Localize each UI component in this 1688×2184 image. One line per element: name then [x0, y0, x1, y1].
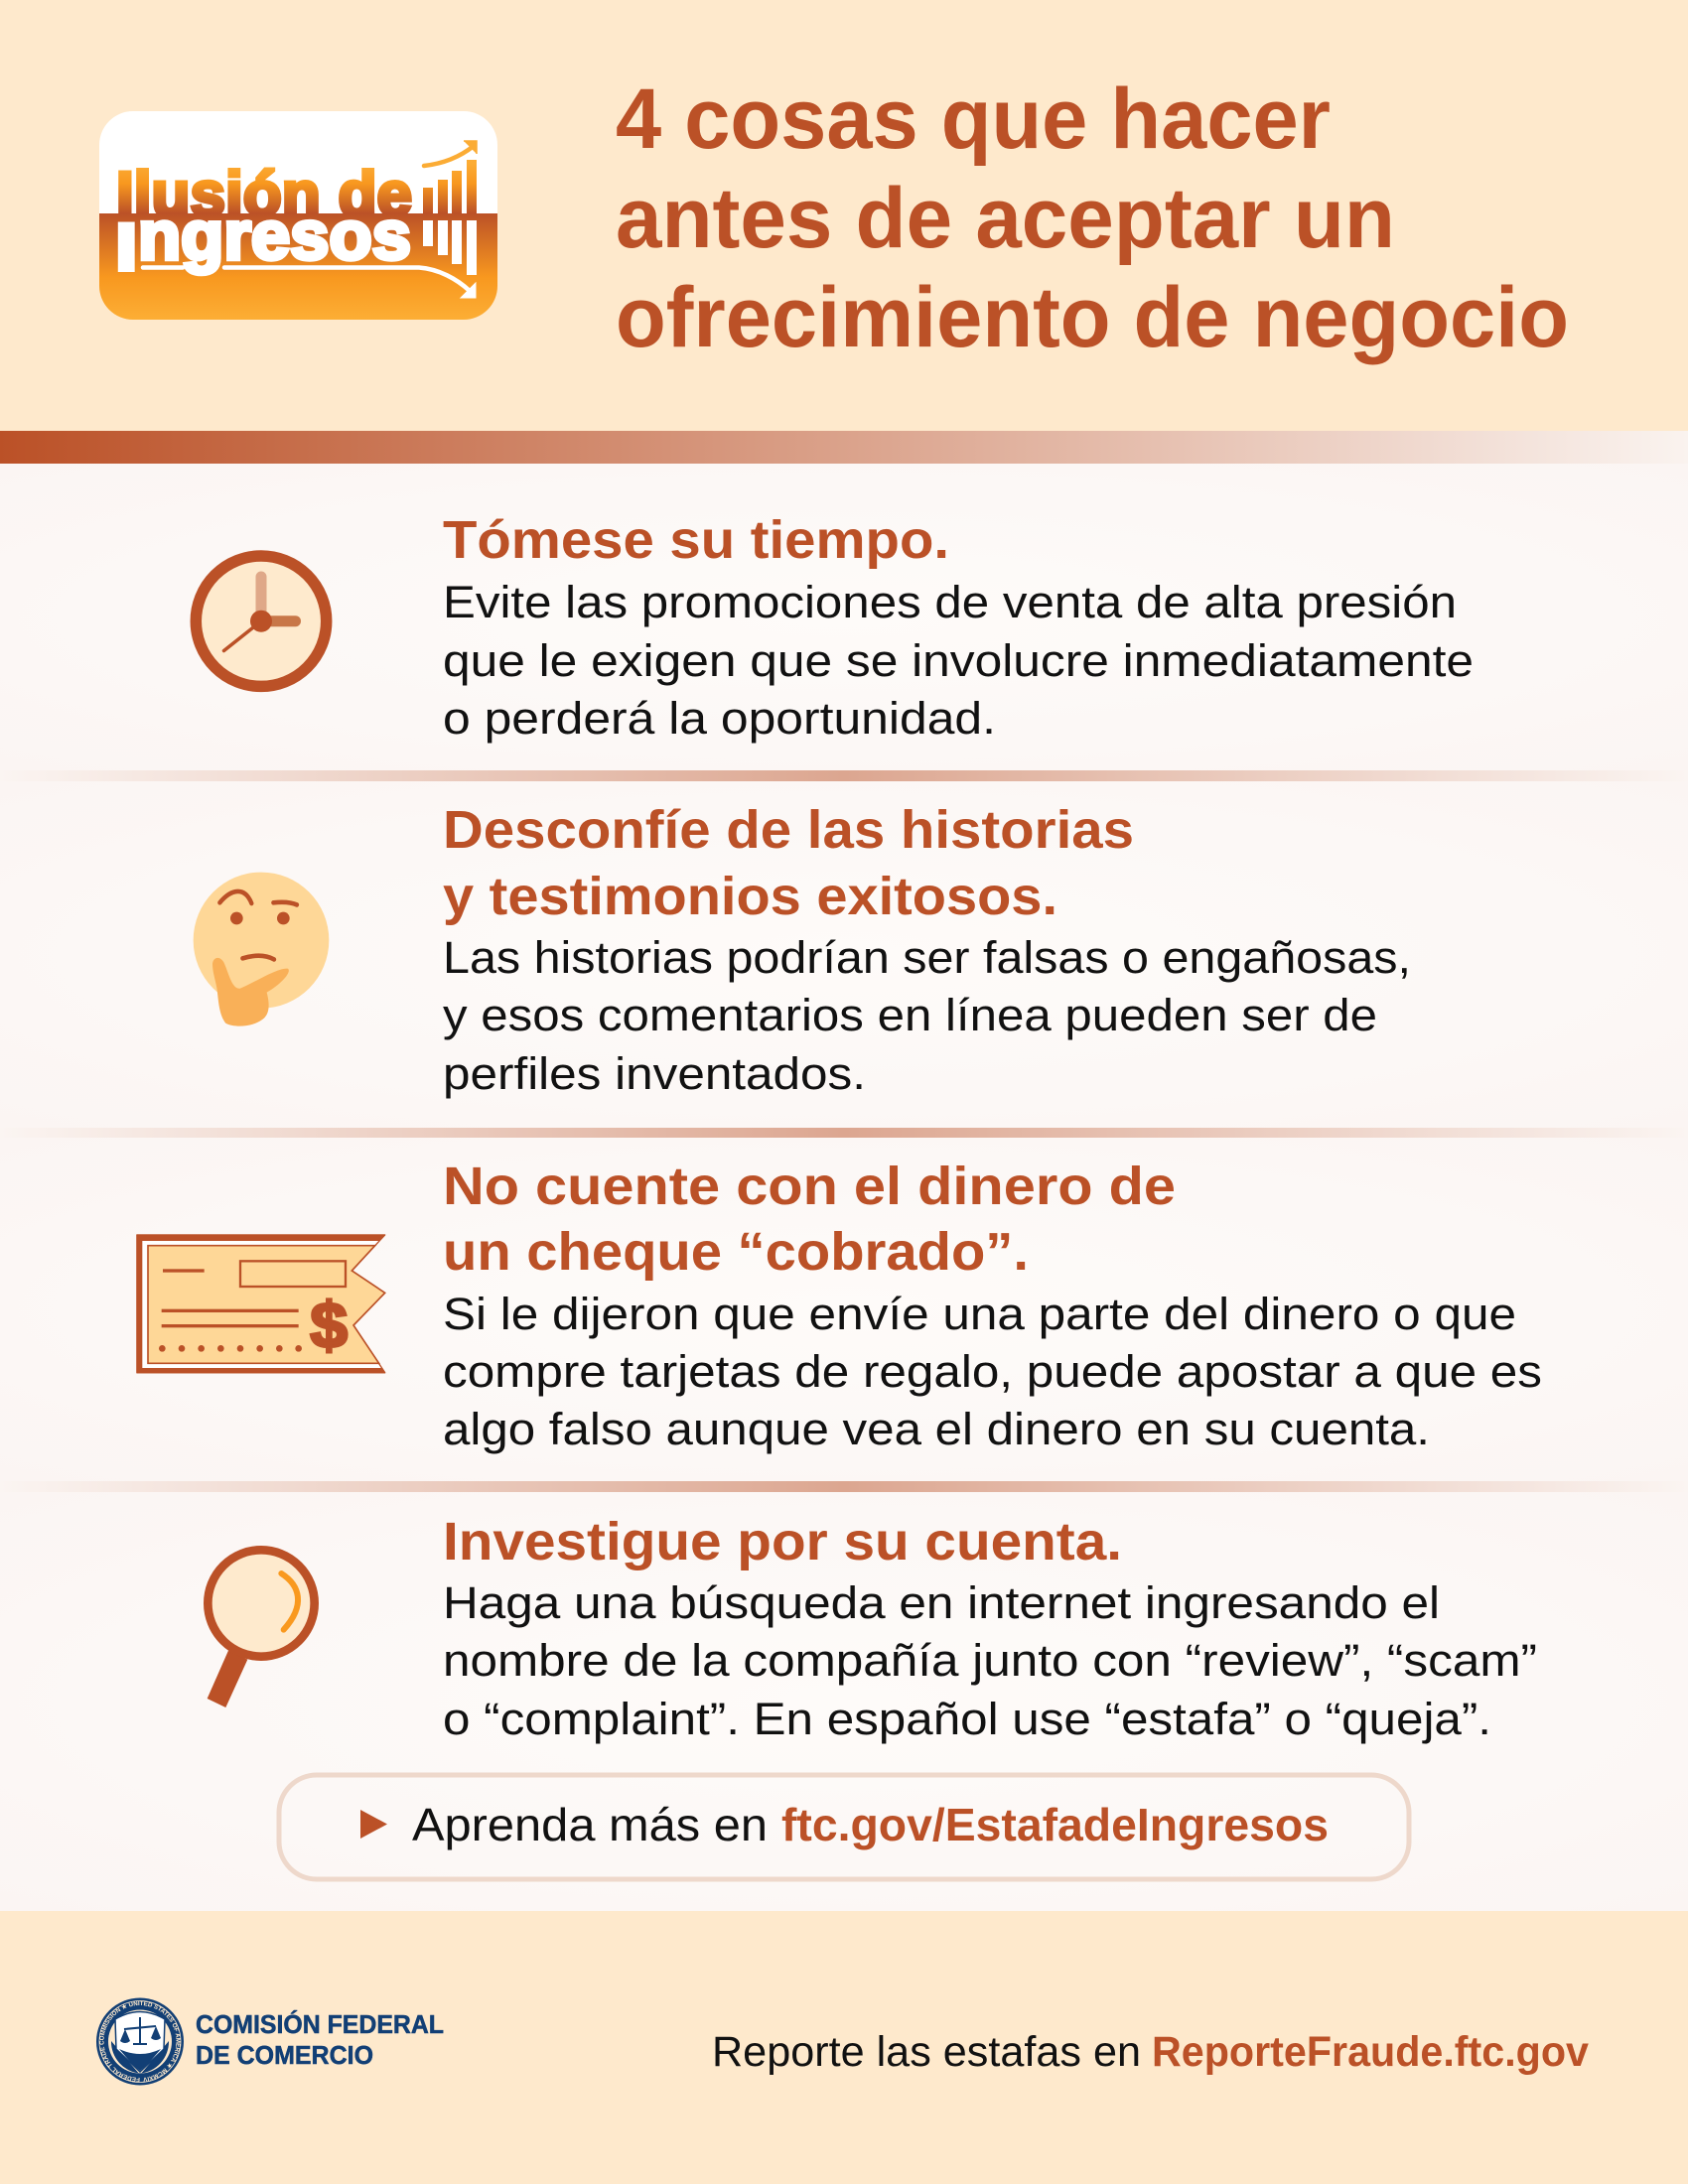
icon: clock	[196, 556, 327, 686]
icon: check	[136, 1234, 385, 1373]
icon: FTC seal: FEDERAL TRADE COMMISSION ★ UNITED STATES OF AMERICA ★ MCMXIV	[99, 2001, 181, 2083]
header: title	[616, 71, 1569, 365]
header: logo: ngresos	[138, 197, 411, 274]
agency name: COMISIÓN FEDERAL	[196, 2009, 444, 2039]
body text: Haga una búsqueda en internet ingresando el	[443, 1577, 1440, 1628]
body text	[443, 932, 1411, 1099]
panel: investigue	[0, 1492, 1688, 1911]
footer: report text: ReporteFraude.ftc.gov	[1152, 2028, 1589, 2076]
body text: compre tarjetas de regalo, puede apostar a que es	[443, 1346, 1542, 1397]
agency name	[196, 2009, 444, 2070]
body text: Evite las promociones de venta de alta presión	[443, 577, 1457, 627]
callout text: Aprenda más en	[412, 1799, 768, 1850]
heading: un cheque “cobrado”.	[443, 1222, 1029, 1282]
body text: y esos comentarios en línea pueden ser de	[443, 990, 1377, 1040]
body text: o “complaint”. En español use “estafa” o “queja”.	[443, 1694, 1491, 1744]
divider	[0, 770, 1688, 781]
divider	[0, 1481, 1688, 1492]
heading	[443, 800, 1134, 926]
panel: cheque	[0, 1138, 1688, 1481]
divider	[0, 1128, 1688, 1138]
heading: y testimonios exitosos.	[443, 867, 1057, 926]
header: title: antes de aceptar un	[616, 171, 1395, 266]
body text: perfiles inventados.	[443, 1048, 866, 1099]
footer: FTC logo	[96, 1997, 444, 2085]
footer: report text: Reporte las estafas en	[712, 2028, 1141, 2076]
callout text: ftc.gov/EstafadeIngresos	[781, 1799, 1329, 1850]
body text: o perderá la oportunidad.	[443, 693, 996, 744]
header: logo: Ilusión de	[116, 160, 412, 229]
body text: que le exigen que se involucre inmediatamente	[443, 635, 1474, 686]
heading: Investigue por su cuenta.	[443, 1512, 1122, 1571]
icon: check: $	[310, 1289, 348, 1361]
heading: Tómese su tiempo.	[443, 510, 949, 570]
gradient band under header	[0, 431, 1688, 464]
callout: learn more	[279, 1775, 1409, 1879]
body text: nombre de la compañía junto con “review”, “scam”	[443, 1635, 1537, 1686]
icon: thinking face	[194, 873, 329, 1026]
body text: Si le dijeron que envíe una parte del dinero o que	[443, 1289, 1516, 1339]
agency name: DE COMERCIO	[196, 2042, 373, 2070]
header: logo	[99, 111, 497, 320]
body text	[443, 577, 1474, 744]
body text	[443, 1289, 1542, 1454]
body text: Las historias podrían ser falsas o engañosas,	[443, 932, 1411, 983]
icon: magnifying glass	[208, 1550, 315, 1707]
body text	[443, 1577, 1537, 1744]
header: title: 4 cosas que hacer	[616, 71, 1331, 167]
icon: play arrow	[360, 1810, 387, 1839]
panel: tomese su tiempo	[0, 464, 1688, 770]
heading: Desconfíe de las historias	[443, 800, 1134, 860]
header: logo: I	[110, 206, 142, 288]
heading	[443, 1157, 1176, 1282]
body text: algo falso aunque vea el dinero en su cuenta.	[443, 1404, 1430, 1454]
heading: No cuente con el dinero de	[443, 1157, 1176, 1216]
panel: desconfie	[0, 781, 1688, 1128]
header: title: ofrecimiento de negocio	[616, 270, 1569, 365]
